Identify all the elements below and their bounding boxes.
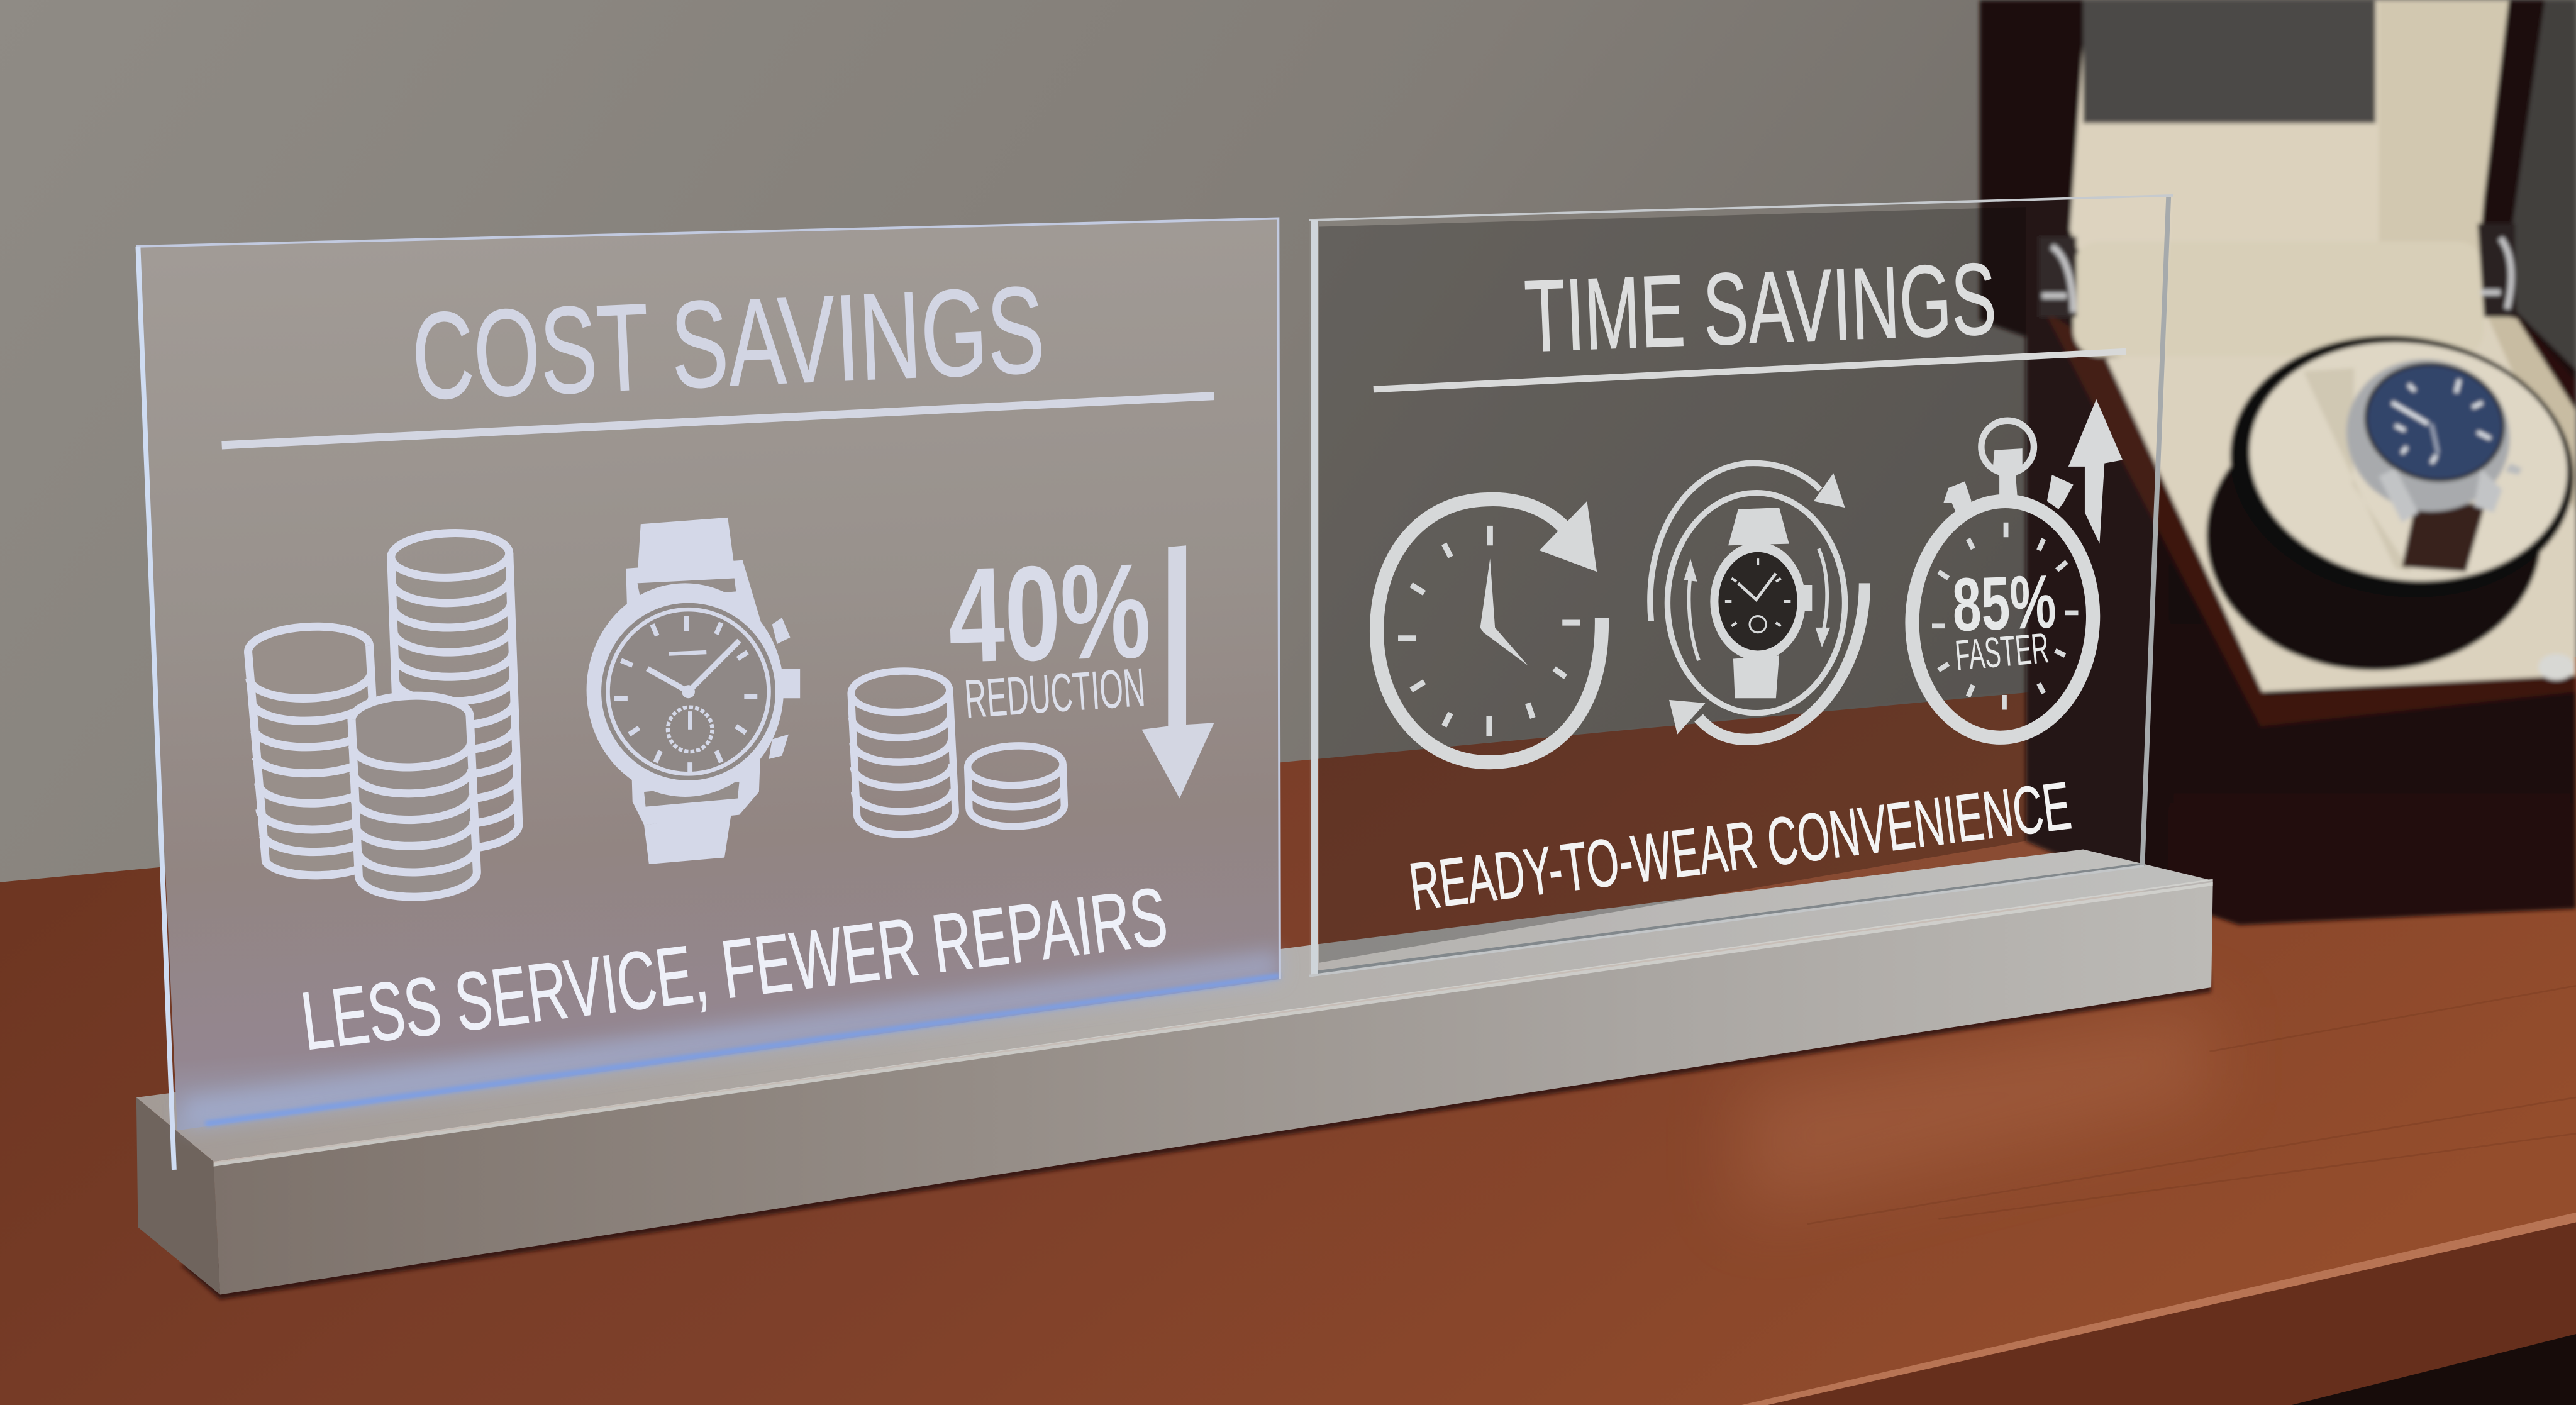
icon: stopwatch bbox=[1906, 399, 2123, 742]
mahogany rim right bbox=[2511, 309, 2576, 542]
plaque bottom glow bbox=[184, 950, 1280, 1130]
stat: 85 percent: 85% bbox=[1951, 559, 2057, 647]
tagline: ready to wear: READY-TO-WEAR CONVENIENCE bbox=[1406, 767, 2075, 925]
mahogany rim left bbox=[2045, 312, 2576, 726]
watch winder box bbox=[1980, 0, 2576, 925]
winder ring bbox=[2213, 314, 2576, 619]
left stack bbox=[247, 624, 381, 879]
heading: time savings: TIME SAVINGS bbox=[1523, 242, 1998, 374]
table front edge bbox=[1741, 1213, 2576, 1405]
clear right plaque bbox=[1309, 196, 2174, 976]
wall background bbox=[0, 0, 2576, 920]
mini watch bbox=[1710, 508, 1812, 698]
base highlight bbox=[214, 879, 2213, 1167]
watch strap top bbox=[638, 518, 735, 575]
back cushion bbox=[2074, 242, 2484, 357]
lid window bbox=[2083, 0, 2375, 123]
base groove bbox=[1314, 864, 2144, 972]
watch case bbox=[2329, 341, 2527, 530]
heading: cost savings: COST SAVINGS bbox=[409, 260, 1047, 426]
tall stack bbox=[391, 531, 519, 852]
watch strap bottom bbox=[644, 815, 731, 864]
panel: cost savings bbox=[136, 218, 1280, 1170]
up arrow bbox=[2068, 399, 2123, 544]
watch lugs bbox=[616, 560, 760, 825]
box inner wall right bbox=[2485, 312, 2576, 513]
plaque edges bbox=[1309, 196, 2174, 220]
plaque blue edge bbox=[206, 976, 1280, 1124]
table reflection bbox=[1741, 1006, 2209, 1216]
chrome clasp bbox=[2538, 654, 2574, 680]
watch dial bbox=[601, 603, 775, 780]
crown bbox=[2506, 464, 2522, 475]
front stack bbox=[351, 694, 478, 899]
table grain bbox=[1807, 986, 2576, 1224]
box silhouette bbox=[1980, 0, 2576, 925]
watch case bbox=[587, 583, 784, 797]
icon: small coin stacks bbox=[850, 669, 1065, 836]
heading rule bbox=[222, 396, 1214, 445]
frosted left plaque bbox=[136, 218, 1280, 1130]
lug gaps bbox=[638, 579, 736, 599]
watch dial bbox=[2355, 352, 2514, 493]
tagline: less service: LESS SERVICE, FEWER REPAIRS bbox=[296, 870, 1172, 1067]
box front face bbox=[2168, 558, 2576, 925]
stat: 40 percent: 40% bbox=[947, 535, 1152, 691]
watch strap bbox=[2402, 503, 2485, 572]
base front face bbox=[214, 882, 2213, 1294]
clock ticks bbox=[1398, 526, 1580, 736]
panel: time savings bbox=[1309, 196, 2174, 976]
base top surface bbox=[136, 850, 2213, 1162]
icon: rotating watch bbox=[1650, 463, 1865, 740]
dial ticks bbox=[614, 616, 757, 775]
winder body bbox=[2206, 401, 2541, 670]
stat label: faster: FASTER bbox=[1953, 625, 2051, 680]
box floor bbox=[2106, 312, 2576, 692]
stat label: reduction: REDUCTION bbox=[963, 657, 1147, 730]
watch hands bbox=[647, 641, 740, 692]
crown and pushers bbox=[769, 618, 800, 759]
plaque edges bbox=[136, 218, 1280, 979]
base shadow bbox=[180, 969, 2211, 1299]
icon: coin stacks large bbox=[247, 531, 519, 899]
icon: clock with arrow bbox=[1377, 499, 1602, 762]
wall behind box right bbox=[2511, 0, 2576, 370]
aluminium base bbox=[136, 850, 2213, 1299]
sub dial bbox=[668, 708, 712, 752]
clock hands bbox=[1480, 558, 1528, 665]
icon: wristwatch bbox=[587, 518, 800, 864]
wooden table bbox=[0, 657, 2576, 1405]
lid interior bbox=[2070, 0, 2509, 271]
heading rule bbox=[1374, 352, 2126, 389]
watch cushion fold bbox=[2303, 368, 2412, 572]
hinges bbox=[2039, 223, 2515, 317]
base left end bbox=[136, 1097, 220, 1294]
icon: down arrow bbox=[1142, 545, 1214, 799]
